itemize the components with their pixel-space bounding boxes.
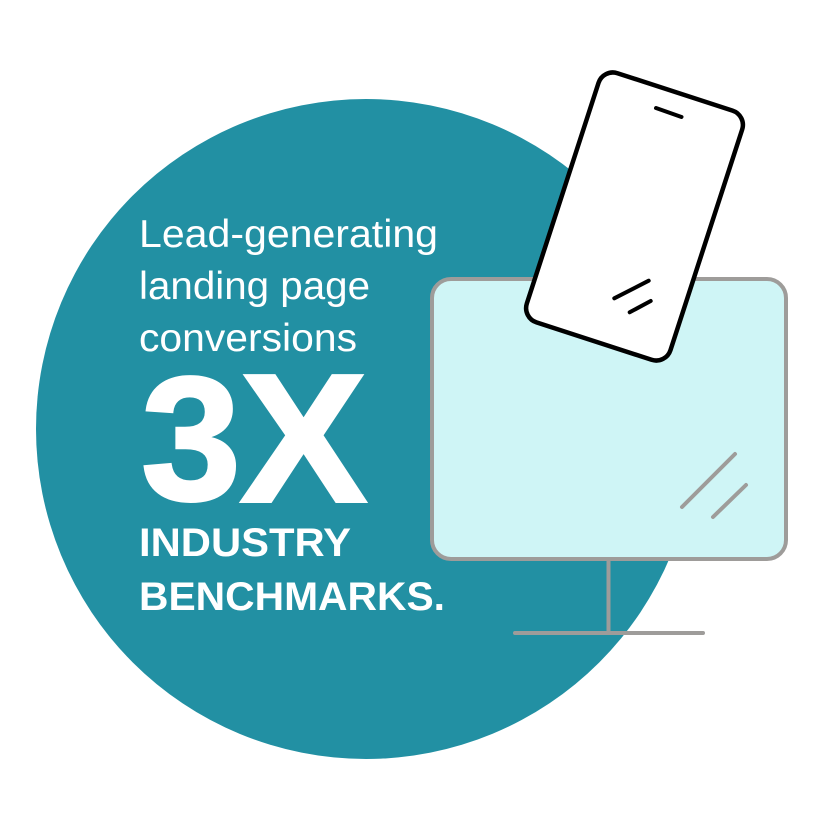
headline text: conversions [139,317,357,360]
monitor stand [515,559,703,633]
headline text [139,213,438,360]
monitor screen [432,279,786,559]
benchmark text: INDUSTRY [139,521,351,565]
3X statistic: X [240,336,367,540]
teal background circle [36,99,696,759]
icon: smartphone [522,69,747,364]
benchmark text: BENCHMARKS. [139,575,445,619]
headline text: Lead-generating [139,213,438,256]
screen glare [682,454,746,517]
3X statistic [141,336,367,540]
phone body [522,69,747,364]
icon: desktop monitor [432,279,786,633]
headline text: landing page [139,265,370,308]
3X statistic: 3 [141,342,241,538]
phone glare [614,281,651,312]
phone speaker [656,108,682,117]
benchmark text [139,521,445,619]
